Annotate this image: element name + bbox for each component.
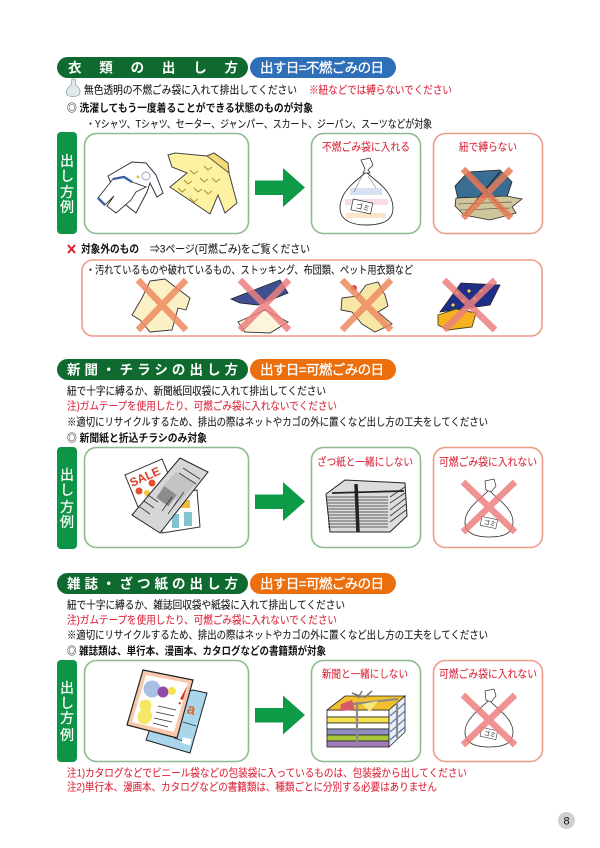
icon: sweater	[168, 153, 237, 214]
heading: newspapers	[57, 359, 248, 380]
collection day pill: non-burnable: 出す日=不燃ごみの日	[260, 60, 384, 76]
collection day pill: burnable: 出す日=可燃ごみの日	[260, 362, 384, 378]
collection day pill: burnable: 出す日=可燃ごみの日	[260, 576, 384, 592]
panel: put in non-burnable bag	[312, 134, 420, 234]
side label: example: 例	[60, 199, 74, 215]
instruction text: 紐で十字に縛るか、新聞紙回収袋に入れて排出してください	[67, 384, 326, 398]
heading: newspapers: 新聞・チラシの出し方	[67, 362, 238, 378]
heading: clothing	[57, 57, 248, 78]
icon: front magazine	[127, 670, 193, 738]
collection day pill: burnable	[250, 359, 396, 380]
icon: newspaper bundle	[326, 480, 407, 532]
side label: example: し	[60, 168, 74, 184]
instruction text: 紐で十字に縛るか、雑誌回収袋や紙袋に入れて排出してください	[67, 598, 345, 612]
excluded items heading: ⇒3ページ(可燃ごみ)をご覧ください	[150, 242, 310, 256]
section: clothing	[57, 57, 542, 336]
heading: magazines: 雑誌・ざつ紙の出し方	[67, 576, 238, 592]
target item list: ・Yシャツ、Tシャツ、セーター、ジャンパー、スカート、ジーパン、スーツなどが対象	[86, 118, 432, 130]
icon: back magazine: a	[185, 700, 198, 719]
panel: magazine example	[84, 660, 248, 762]
icon: tied clothes crossed out	[455, 169, 522, 220]
arrow	[255, 696, 305, 734]
heading: magazines	[57, 573, 248, 594]
icon: newspaper	[132, 458, 208, 533]
side label: example: 方	[60, 499, 74, 515]
icon: polo shirt	[108, 162, 163, 213]
panel: clothes example	[84, 134, 248, 234]
excluded items heading: 対象外のもの	[81, 242, 139, 256]
side label: example: し	[60, 695, 74, 711]
arrow	[255, 482, 305, 521]
recycling note: ※適切にリサイクルするため、排出の際はネットやカゴの外に置くなど出し方の工夫をしてください	[67, 416, 488, 428]
icon: torn clothing crossed out	[341, 280, 392, 332]
panel: not in burnable bag: 可燃ごみ袋に入れない	[439, 666, 537, 680]
excluded items heading	[68, 242, 310, 256]
icon: bedding crossed out	[438, 280, 500, 330]
icon: dirty shirt crossed out	[132, 279, 190, 332]
side label: example	[57, 660, 77, 762]
section: newspapers and flyers	[57, 359, 542, 549]
warning: do not tie: ※紐などでは縛らないでください	[309, 84, 452, 96]
footnote 1: 注1)カタログなどでビニール袋などの包装袋に入っているものは、包装袋から出してください	[67, 766, 467, 780]
collection day pill: burnable	[250, 573, 396, 594]
side label: example: 例	[60, 514, 74, 530]
side label: example: 出	[60, 153, 74, 169]
icon: back magazine	[146, 690, 207, 753]
target condition: ◎ 洗濯してもう一度着ることができる状態のものが対象	[67, 102, 313, 114]
target condition: ◎ 雑誌類は、単行本、漫画本、カタログなどの書籍類が対象	[67, 644, 326, 658]
page number: 8	[563, 816, 570, 828]
icon: flyers	[125, 459, 200, 533]
recycling note: ※適切にリサイクルするため、排出の際はネットやカゴの外に置くなど出し方の工夫をしてください	[67, 628, 488, 642]
warning: 注)ガムテープを使用したり、可燃ごみ袋に入れないでください	[67, 614, 337, 626]
icon: bag crossed out: ゴミ	[483, 518, 496, 528]
icon: magazine bundle	[327, 691, 405, 748]
target condition: ◎ 新聞紙と折込チラシのみ対象	[67, 432, 207, 444]
icon: garbage bag: ゴミ	[355, 201, 371, 213]
side label: example: 方	[60, 710, 74, 726]
panel: excluded items	[82, 260, 542, 336]
side label: example: し	[60, 482, 74, 498]
icon: flyers: SALE	[128, 464, 162, 490]
collection day pill: non-burnable	[250, 57, 396, 78]
icon: stockings crossed out	[231, 280, 289, 333]
panel: do not tie with string: 紐で縛らない	[459, 140, 517, 154]
side label: example: 例	[60, 727, 74, 743]
side label: example: 出	[60, 467, 74, 483]
instruction text: 無色透明の不燃ごみ袋に入れて排出してください	[84, 84, 297, 96]
arrow	[255, 168, 305, 207]
page number	[558, 812, 575, 829]
section: magazines and miscellaneous paper	[57, 573, 542, 794]
icon: bag crossed out: ゴミ	[483, 729, 496, 739]
panel: not with newspapers	[312, 660, 420, 762]
footnote 2: 注2)単行本、漫画本、カタログなどの書籍類は、種類ごとに分別する必要はありません	[67, 780, 437, 794]
panel: put in non-burnable bag: 不燃ごみ袋に入れる	[322, 140, 410, 154]
panel: do not tie with string	[434, 134, 542, 234]
side label: example: 方	[60, 184, 74, 200]
panel: not with miscellaneous paper: ざつ紙と一緒にしない	[317, 454, 413, 468]
panel: not in burnable bag: 可燃ごみ袋に入れない	[439, 454, 537, 468]
side label: example	[57, 132, 77, 234]
panel: newspaper example	[84, 448, 248, 548]
panel: not with miscellaneous paper	[312, 448, 420, 548]
panel: not with newspapers: 新聞と一緒にしない	[322, 666, 408, 680]
panel: not in burnable bag	[434, 448, 542, 548]
side label: example: 出	[60, 680, 74, 696]
warning: 注)ガムテープを使用したり、可燃ごみ袋に入れないでください	[67, 400, 337, 412]
icon: clear bag	[66, 79, 80, 96]
heading: clothing: 衣類の出し方	[68, 60, 238, 76]
panel: excluded items: ・汚れているものや破れているもの、ストッキング、布団類、ペット用衣類など	[86, 264, 413, 276]
icon: t-shirt	[98, 177, 146, 213]
side label: example	[57, 447, 77, 549]
panel: not in burnable bag	[434, 660, 542, 762]
